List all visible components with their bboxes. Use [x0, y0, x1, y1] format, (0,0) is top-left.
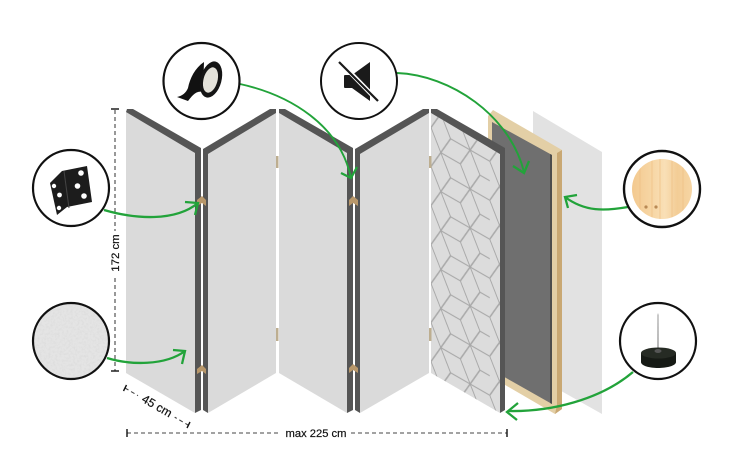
dimension: depth 45 cm — [124, 385, 190, 428]
circle: mute icon — [321, 43, 397, 119]
panel 3 top edge and strip — [279, 109, 353, 413]
arrow: mute to filling — [397, 73, 529, 173]
arrow: texture to panel — [107, 350, 185, 364]
screen panel 3 — [279, 113, 347, 413]
arrow: wood to frame — [565, 195, 628, 210]
screen panel 4 — [360, 113, 429, 413]
circle: hinge icon — [33, 150, 109, 226]
circle: wood texture — [624, 151, 700, 227]
circle: felt texture — [33, 303, 109, 379]
arrow: hinge to joint — [104, 202, 198, 217]
dimension: depth 45 cm: 45 cm — [139, 392, 175, 420]
screen panel 1 — [126, 112, 195, 413]
dimension: width max 225 cm: max 225 cm — [286, 428, 346, 440]
dimension: width max 225 cm — [127, 426, 507, 440]
screen panel 2 — [208, 113, 276, 413]
dimension: height 172 cm — [108, 109, 122, 371]
circle: tape icon — [164, 43, 240, 119]
circle: pin icon — [620, 303, 696, 379]
panel 4 top edge and strip — [355, 109, 429, 413]
back cover panel — [533, 111, 602, 414]
wooden frame — [488, 110, 562, 414]
panel 1 top edge and strip — [126, 109, 201, 413]
arrow: tape to edge — [240, 84, 357, 178]
panel 5 top edge and strip — [431, 109, 505, 413]
screen panel 5 with pattern — [431, 113, 500, 413]
arrow: pin to bottom — [507, 372, 633, 420]
grey acoustic filling — [492, 122, 552, 404]
hinges — [197, 156, 432, 374]
panel 2 top edge and strip — [203, 109, 276, 413]
dimension: height 172 cm: 172 cm — [110, 234, 122, 272]
